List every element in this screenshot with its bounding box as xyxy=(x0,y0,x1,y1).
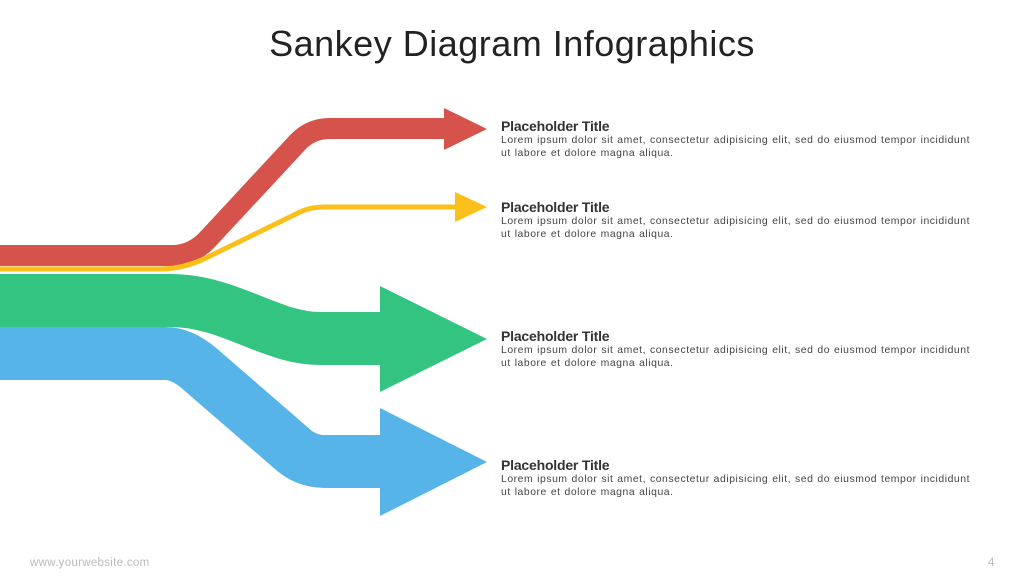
page number: 4 xyxy=(988,557,995,569)
flow: blue xyxy=(0,354,487,516)
text block 1: Lorem ipsum dolor sit amet, consectetur adipisicing elit, sed do eiusmod tempor incididunt xyxy=(501,135,970,146)
text block 2: Placeholder Title xyxy=(501,199,609,215)
text block 3: Lorem ipsum dolor sit amet, consectetur adipisicing elit, sed do eiusmod tempor incididunt xyxy=(501,345,970,356)
text block 4: Lorem ipsum dolor sit amet, consectetur adipisicing elit, sed do eiusmod tempor incididunt xyxy=(501,474,970,485)
text block 4: ut labore et dolore magna aliqua. xyxy=(501,486,674,498)
flow: red xyxy=(0,108,487,256)
title: Sankey Diagram Infographics xyxy=(269,23,755,64)
text block 3: Placeholder Title xyxy=(501,328,609,344)
text block 3 xyxy=(501,328,970,368)
flow: yellow xyxy=(0,192,487,269)
text block 4: Placeholder Title xyxy=(501,457,609,473)
text block 3: ut labore et dolore magna aliqua. xyxy=(501,358,674,368)
text block 2: Lorem ipsum dolor sit amet, consectetur adipisicing elit, sed do eiusmod tempor incididunt xyxy=(501,216,970,227)
text block 2: ut labore et dolore magna aliqua. xyxy=(501,228,674,240)
text block 1: ut labore et dolore magna aliqua. xyxy=(501,148,674,158)
flow: green xyxy=(0,286,487,392)
footer website: www.yourwebsite.com xyxy=(30,557,149,569)
text block 1: Placeholder Title xyxy=(501,118,609,134)
text block 4 xyxy=(501,457,970,498)
text block 2 xyxy=(501,199,970,240)
text block 1 xyxy=(501,118,970,158)
